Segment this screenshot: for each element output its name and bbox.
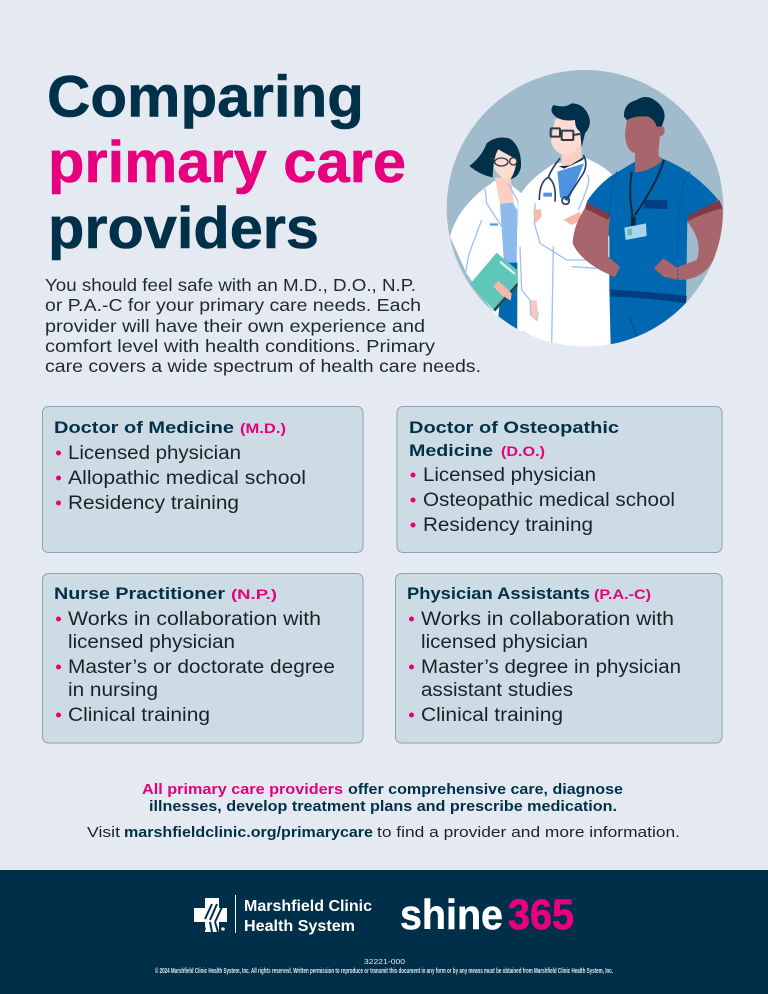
panel: physician assistants: Master’s degree in physician	[421, 657, 681, 678]
intro paragraph: comfort level with health conditions. Primary	[45, 336, 435, 356]
panel: doctor of medicine: (M.D.)	[240, 421, 286, 436]
panel: doctor of medicine: Allopathic medical school	[68, 468, 306, 489]
panel: nurse practitioner: Nurse Practitioner	[54, 584, 225, 603]
document number: 32221-000	[364, 957, 405, 966]
panel: nurse practitioner: Works in collaboration with	[68, 609, 321, 630]
title	[47, 64, 406, 261]
panel: doctor of medicine	[42, 406, 363, 552]
logo: shine365: 365	[508, 891, 574, 939]
panel: physician assistants: assistant studies	[421, 680, 573, 701]
intro paragraph	[45, 275, 481, 376]
call to action link line: to find a provider and more information.	[377, 824, 680, 841]
panel: doctor of osteopathic medicine: Osteopathic medical school	[423, 490, 675, 511]
logo: shine365	[400, 891, 574, 939]
panel: doctor of medicine: Doctor of Medicine	[54, 418, 234, 437]
panel: physician assistants	[396, 574, 722, 743]
summary statement: illnesses, develop treatment plans and prescribe medication.	[149, 798, 617, 815]
panel: doctor of osteopathic medicine: Residency training	[423, 515, 593, 536]
logo: shine365: shine	[400, 891, 503, 938]
title: providers	[48, 196, 319, 261]
panel: doctor of osteopathic medicine: Doctor of Osteopathic	[409, 418, 619, 437]
call to action link line	[87, 824, 680, 841]
panel: nurse practitioner: licensed physician	[68, 632, 235, 653]
panel: physician assistants: licensed physician	[421, 632, 588, 653]
illustration: three care providers in circle	[447, 70, 723, 347]
intro paragraph: or P.A.-C for your primary care needs. Each	[45, 295, 421, 315]
panel: nurse practitioner: Clinical training	[68, 705, 210, 726]
panel: doctor of osteopathic medicine: Medicine	[409, 441, 493, 460]
panel: physician assistants: Physician Assistants	[407, 584, 590, 603]
panel: nurse practitioner: (N.P.)	[231, 587, 277, 602]
logo: marshfield clinic health system	[194, 895, 372, 935]
panel: doctor of osteopathic medicine: Licensed physician	[423, 465, 596, 486]
summary statement: offer comprehensive care, diagnose	[348, 781, 623, 798]
panel: doctor of medicine: Residency training	[68, 493, 239, 514]
logo: marshfield clinic health system: Marshfield Clinic	[244, 898, 372, 915]
title: Comparing	[47, 64, 364, 130]
panel: physician assistants: Works in collaboration with	[421, 609, 674, 630]
intro paragraph: care covers a wide spectrum of health care needs.	[45, 356, 481, 376]
panel: nurse practitioner: in nursing	[68, 680, 158, 701]
panel: doctor of medicine: Licensed physician	[68, 443, 241, 464]
summary statement	[142, 781, 623, 815]
logo: marshfield clinic health system: Health System	[244, 918, 355, 935]
panel: nurse practitioner: Master’s or doctorate degree	[68, 657, 335, 678]
panel: nurse practitioner	[42, 574, 363, 743]
panel: physician assistants: Clinical training	[421, 705, 563, 726]
call to action link line: marshfieldclinic.org/primarycare	[124, 824, 373, 841]
call to action link line: Visit	[87, 824, 121, 841]
intro paragraph: You should feel safe with an M.D., D.O., N.P.	[45, 275, 416, 295]
panel: doctor of osteopathic medicine	[397, 406, 722, 552]
panel: physician assistants: (P.A.-C)	[594, 587, 651, 602]
title: primary care	[48, 130, 406, 195]
summary statement: All primary care providers	[142, 781, 343, 798]
panel: doctor of osteopathic medicine: (D.O.)	[501, 444, 545, 459]
footer band	[0, 870, 768, 994]
intro paragraph: provider will have their own experience and	[45, 316, 425, 336]
